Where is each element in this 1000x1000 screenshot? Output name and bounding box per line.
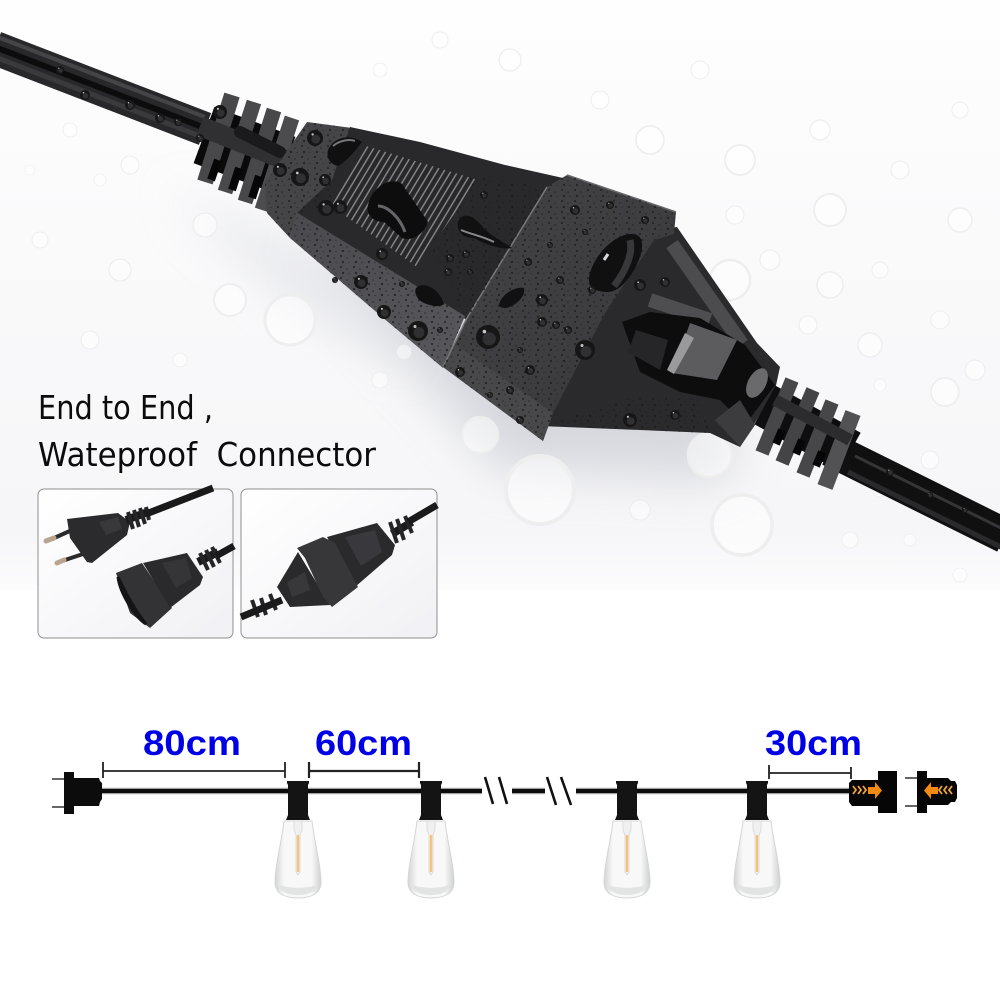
inset photo: plug and socket joined	[241, 489, 437, 638]
strain relief fins: right	[762, 380, 853, 487]
dimension: 30cm: 30cm	[765, 724, 862, 763]
output socket with orange arrow	[849, 771, 897, 813]
heading	[38, 388, 376, 474]
plug lower wall	[290, 212, 465, 368]
plug body	[67, 513, 130, 563]
inset photo: plug and socket separated	[38, 488, 234, 638]
dimension: 30cm	[765, 724, 862, 779]
dimension: 60cm	[309, 724, 419, 778]
plug pins	[52, 530, 86, 561]
joined left body	[277, 552, 330, 607]
plug neck	[265, 122, 352, 238]
speckled water film on the connector	[265, 122, 710, 441]
break marks	[485, 777, 571, 805]
socket 4 and bulb	[734, 781, 780, 898]
plug upper dark face	[296, 127, 563, 320]
cable: right side	[830, 449, 1000, 549]
socket body	[143, 553, 203, 608]
photo background: wet white surface	[0, 0, 1000, 590]
large water droplets on the connector	[273, 130, 680, 427]
socket band	[116, 563, 172, 628]
heading: Wateproof Connector	[38, 435, 376, 474]
input plug	[52, 772, 102, 814]
socket fins and cable	[198, 552, 218, 562]
waterproof connector: plug half	[265, 122, 563, 368]
main wire	[100, 788, 852, 794]
mating plug with orange arrow	[905, 771, 957, 813]
dimension: 60cm: 60cm	[315, 724, 412, 763]
ribbed grip	[330, 145, 478, 267]
cable: left side	[0, 36, 205, 138]
socket 2 and bulb	[408, 781, 454, 898]
socket 3 and bulb	[604, 781, 650, 898]
wiring diagram	[52, 724, 957, 898]
strain relief fins: left	[196, 95, 300, 210]
waterproof connector: socket half	[540, 227, 780, 447]
dimension: 80cm	[103, 724, 285, 778]
heading: End to End ,	[38, 388, 213, 427]
waterproof connector: centre band	[443, 175, 676, 441]
joined band	[297, 537, 358, 607]
joined fins and cables	[392, 522, 412, 534]
socket 1 and bulb	[275, 781, 321, 898]
socket recess and latch	[622, 312, 775, 425]
plug fins and cable	[126, 512, 148, 520]
dimension: 80cm: 80cm	[143, 724, 241, 763]
joined right body	[327, 523, 395, 587]
